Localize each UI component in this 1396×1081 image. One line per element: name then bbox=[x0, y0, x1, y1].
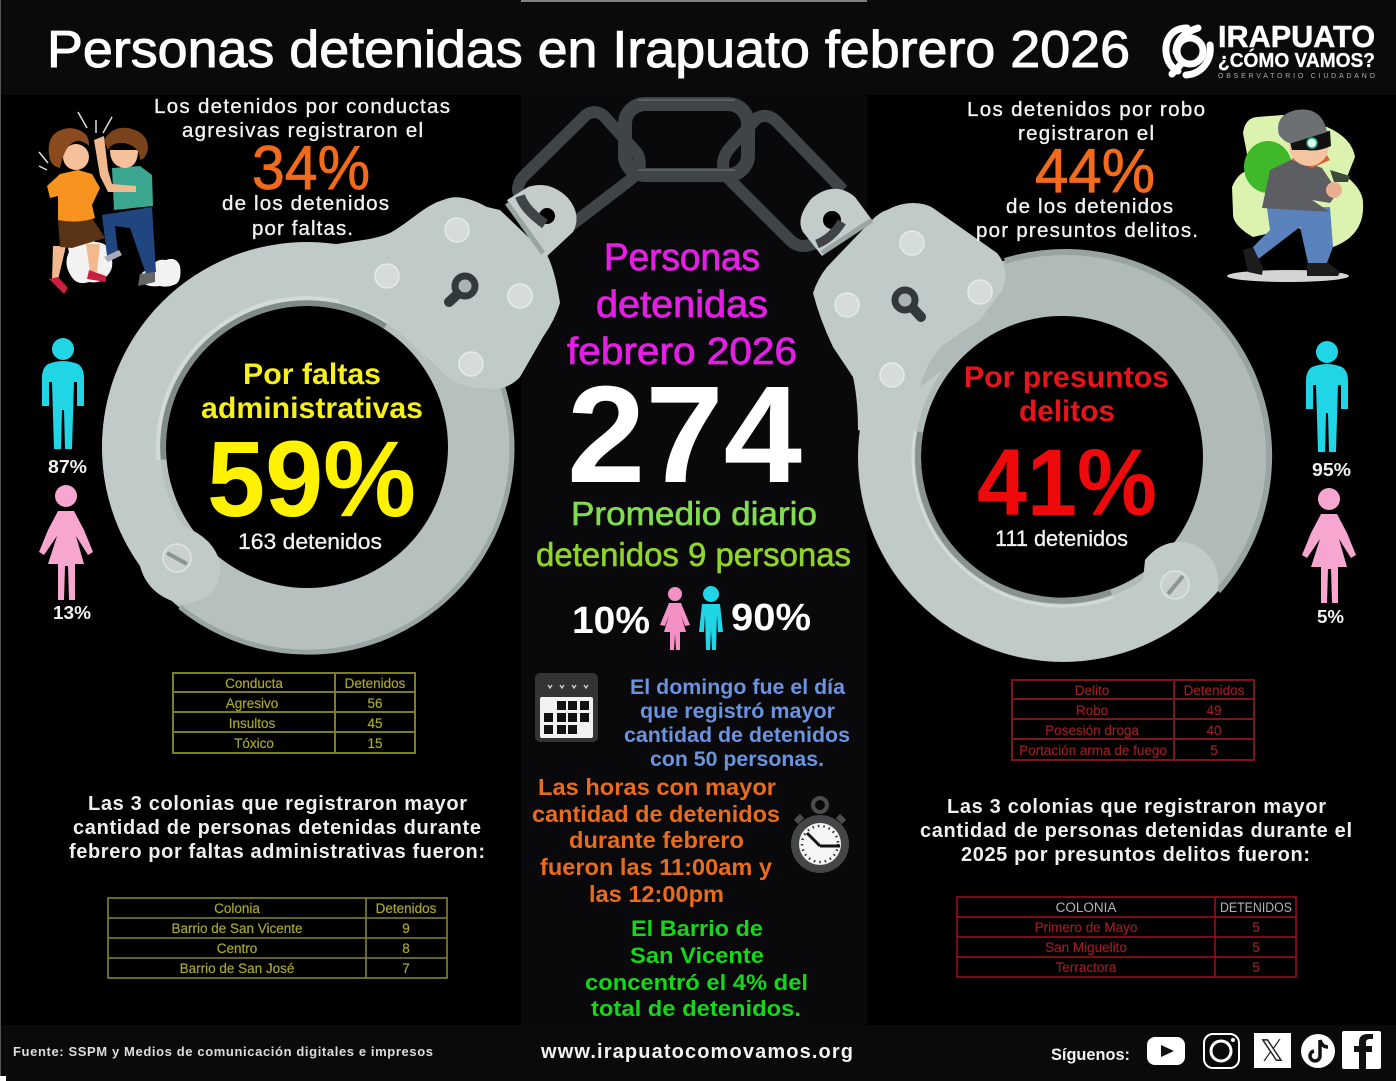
daily average bbox=[536, 495, 851, 573]
icon: chain links bbox=[518, 100, 843, 246]
table: colonias faltas: Barrio de San Vicente bbox=[171, 921, 303, 936]
center heading: febrero 2026 bbox=[567, 331, 797, 373]
stat: faltas administrativas 59% bbox=[201, 358, 423, 554]
text block: horas: cantidad de detenidos bbox=[532, 801, 780, 827]
text block: robo 44%: de los detenidos bbox=[1006, 195, 1173, 218]
logo: Irapuato ¿Cómo Vamos?: ¿CÓMO VAMOS? bbox=[1218, 48, 1375, 72]
label: 5%: 5% bbox=[1317, 607, 1344, 627]
stat: faltas administrativas 59%: 59% bbox=[207, 418, 416, 539]
table: colonias delitos: 5 bbox=[1252, 920, 1260, 935]
text block: conductas agresivas 34%: de los detenidos bbox=[222, 192, 389, 215]
table: colonias faltas: Barrio de San José bbox=[180, 961, 294, 976]
table: conductas: Conducta bbox=[225, 676, 283, 691]
center heading bbox=[567, 237, 797, 373]
text block: horas bbox=[532, 774, 780, 907]
stat: presuntos delitos 41% bbox=[964, 361, 1169, 551]
text block: horas: durante febrero bbox=[569, 827, 744, 853]
social bbox=[1051, 1031, 1381, 1069]
text block: horas: las 12:00pm bbox=[589, 881, 724, 907]
table: delitos: 49 bbox=[1206, 703, 1222, 718]
table: conductas bbox=[173, 673, 415, 753]
logo: Irapuato ¿Cómo Vamos? bbox=[1166, 19, 1376, 80]
left handcuff bbox=[102, 185, 577, 652]
rivets bbox=[835, 231, 992, 387]
body bbox=[813, 203, 1005, 440]
upper arm and boss bbox=[102, 242, 431, 604]
table: conductas: 56 bbox=[367, 696, 383, 711]
text block: conductas agresivas 34%: 34% bbox=[252, 134, 370, 203]
body bbox=[330, 197, 560, 389]
icon: male bbox=[699, 586, 723, 650]
icon: stopwatch bbox=[791, 798, 849, 873]
text block: robo 44%: 44% bbox=[1035, 137, 1155, 206]
table: delitos: Delito bbox=[1075, 683, 1109, 698]
icon: keyhole bbox=[895, 290, 921, 317]
table: delitos: Robo bbox=[1076, 703, 1108, 718]
stat: faltas administrativas 59%: administrativas bbox=[201, 392, 423, 425]
text block: domingo: El domingo fue el día bbox=[630, 676, 845, 699]
text block: domingo: con 50 personas. bbox=[650, 748, 824, 771]
icon: female bbox=[660, 587, 690, 650]
table: colonias faltas bbox=[108, 898, 447, 978]
table: colonias delitos bbox=[957, 897, 1296, 977]
table: delitos: 5 bbox=[1210, 743, 1218, 758]
table: colonias faltas: Colonia bbox=[214, 901, 260, 916]
stat: presuntos delitos 41%: Por presuntos bbox=[964, 361, 1169, 394]
rivets bbox=[375, 218, 532, 376]
text block: Barrio de San Vicente: El Barrio de bbox=[631, 916, 763, 941]
text block: colonias delitos: cantidad de personas detenidas durante el bbox=[920, 820, 1352, 842]
icon: keyhole bbox=[449, 276, 475, 302]
table: colonias faltas: Detenidos bbox=[376, 901, 437, 916]
label: 87%: 87% bbox=[48, 457, 87, 477]
logo: Irapuato ¿Cómo Vamos?: OBSERVATORIO CIUDADANO bbox=[1218, 73, 1376, 80]
table: colonias delitos: 5 bbox=[1252, 940, 1260, 955]
table: conductas: Detenidos bbox=[345, 676, 406, 691]
daily average: detenidos 9 personas bbox=[536, 536, 851, 573]
illustration: kids fighting bbox=[39, 112, 180, 294]
table: delitos bbox=[1012, 680, 1254, 760]
text block: colonias delitos: Las 3 colonias que registraron mayor bbox=[947, 796, 1326, 818]
stat: presuntos delitos 41%: 41% bbox=[977, 430, 1157, 536]
icon: logo mark bbox=[1166, 28, 1210, 75]
text block: colonias faltas: febrero por faltas administrativas fueron: bbox=[69, 841, 485, 863]
text block: conductas agresivas 34% bbox=[154, 95, 450, 240]
icon: calendar bbox=[535, 673, 598, 742]
table: colonias delitos: DETENIDOS bbox=[1220, 900, 1292, 915]
icon: tiktok bbox=[1301, 1034, 1335, 1068]
center heading: Personas bbox=[604, 237, 760, 279]
text block: domingo: que registró mayor bbox=[640, 700, 835, 723]
table: conductas: Tóxico bbox=[234, 736, 274, 751]
icon: male figure left bbox=[42, 338, 84, 449]
text block: conductas agresivas 34%: Los detenidos por conductas bbox=[154, 95, 450, 118]
gender split: 10% bbox=[572, 600, 650, 642]
table: conductas: 15 bbox=[367, 736, 383, 751]
table: delitos: Posesión droga bbox=[1045, 723, 1139, 738]
text block: colonias delitos: 2025 por presuntos delitos fueron: bbox=[961, 844, 1310, 866]
lower arm and boss bbox=[858, 370, 1219, 662]
table: colonias delitos: COLONIA bbox=[1056, 900, 1116, 915]
icon: female figure right bbox=[1302, 488, 1356, 603]
text block: colonias faltas bbox=[69, 793, 485, 863]
text block: horas: Las horas con mayor bbox=[538, 774, 776, 800]
text block: robo 44%: Los detenidos por robo bbox=[967, 98, 1205, 121]
right handcuff bbox=[800, 189, 1269, 662]
text block: colonias delitos bbox=[920, 796, 1352, 866]
text block: domingo bbox=[624, 676, 850, 771]
table: delitos: Detenidos bbox=[1184, 683, 1245, 698]
table: colonias faltas: 8 bbox=[402, 941, 410, 956]
logo: Irapuato ¿Cómo Vamos?: IRAPUATO bbox=[1218, 19, 1375, 54]
illustration: thief bbox=[1227, 109, 1363, 282]
table: colonias faltas: Centro bbox=[217, 941, 257, 956]
daily average: Promedio diario bbox=[571, 495, 817, 532]
icon: lug bbox=[800, 189, 872, 256]
text block: Barrio de San Vicente bbox=[585, 916, 808, 1021]
text block: robo 44% bbox=[967, 98, 1205, 242]
icon: x bbox=[1254, 1033, 1291, 1068]
source: Fuente: SSPM y Medios de comunicación digitales e impresos bbox=[13, 1044, 433, 1059]
table: colonias delitos: Primero de Mayo bbox=[1035, 920, 1137, 935]
table: delitos: 40 bbox=[1206, 723, 1222, 738]
stat: faltas administrativas 59%: Por faltas bbox=[243, 358, 381, 391]
text block: horas: fueron las 11:00am y bbox=[540, 854, 772, 880]
icon: x: 𝕏 bbox=[1260, 1035, 1284, 1068]
table: delitos: Portación arma de fuego bbox=[1019, 743, 1167, 758]
title: Personas detenidas en Irapuato febrero 2026 bbox=[47, 21, 1130, 79]
text block: robo 44%: registraron el bbox=[1018, 122, 1154, 145]
total: 274: 274 bbox=[567, 358, 802, 512]
table: conductas: Insultos bbox=[229, 716, 276, 731]
table: conductas: Agresivo bbox=[226, 696, 278, 711]
icon: lug bbox=[507, 185, 577, 258]
table: colonias faltas: 7 bbox=[402, 961, 410, 976]
text block: Barrio de San Vicente: total de detenidos. bbox=[591, 996, 801, 1021]
text block: Barrio de San Vicente: concentró el 4% del bbox=[585, 970, 808, 995]
label: 13%: 13% bbox=[53, 603, 91, 623]
text block: conductas agresivas 34%: agresivas registraron el bbox=[182, 119, 423, 142]
text block: colonias faltas: cantidad de personas detenidas durante bbox=[73, 817, 481, 839]
text block: domingo: cantidad de detenidos bbox=[624, 724, 850, 747]
text block: Barrio de San Vicente: San Vicente bbox=[630, 943, 764, 968]
table: colonias delitos: San Miguelito bbox=[1045, 940, 1127, 955]
text block: robo 44%: por presuntos delitos. bbox=[976, 219, 1198, 242]
table: colonias delitos: 5 bbox=[1252, 960, 1260, 975]
gender split bbox=[572, 586, 811, 650]
icon: facebook bbox=[1342, 1031, 1381, 1069]
icon: instagram bbox=[1204, 1034, 1239, 1068]
icon: screw bbox=[163, 544, 191, 572]
stat: presuntos delitos 41%: delitos bbox=[1019, 395, 1115, 428]
table: colonias delitos: Terractora bbox=[1056, 960, 1117, 975]
icon: male figure right bbox=[1306, 341, 1348, 452]
icon: youtube bbox=[1147, 1037, 1185, 1065]
icon: chain hook bbox=[817, 222, 842, 244]
text block: conductas agresivas 34%: por faltas. bbox=[252, 217, 353, 240]
stat: presuntos delitos 41%: 111 detenidos bbox=[995, 526, 1128, 551]
table: colonias faltas: 9 bbox=[402, 921, 410, 936]
center heading: detenidas bbox=[596, 284, 768, 326]
text block: colonias faltas: Las 3 colonias que registraron mayor bbox=[88, 793, 467, 815]
website: www.irapuatocomovamos.org bbox=[540, 1041, 853, 1063]
icon: female figure left bbox=[39, 485, 93, 600]
gender split: 90% bbox=[731, 597, 811, 639]
label: 95%: 95% bbox=[1312, 460, 1351, 480]
social: Síguenos: bbox=[1051, 1045, 1130, 1064]
icon: screw bbox=[1161, 571, 1189, 599]
stat: faltas administrativas 59%: 163 detenidos bbox=[238, 529, 382, 554]
table: conductas: 45 bbox=[367, 716, 383, 731]
icon: chain hook bbox=[520, 196, 545, 224]
